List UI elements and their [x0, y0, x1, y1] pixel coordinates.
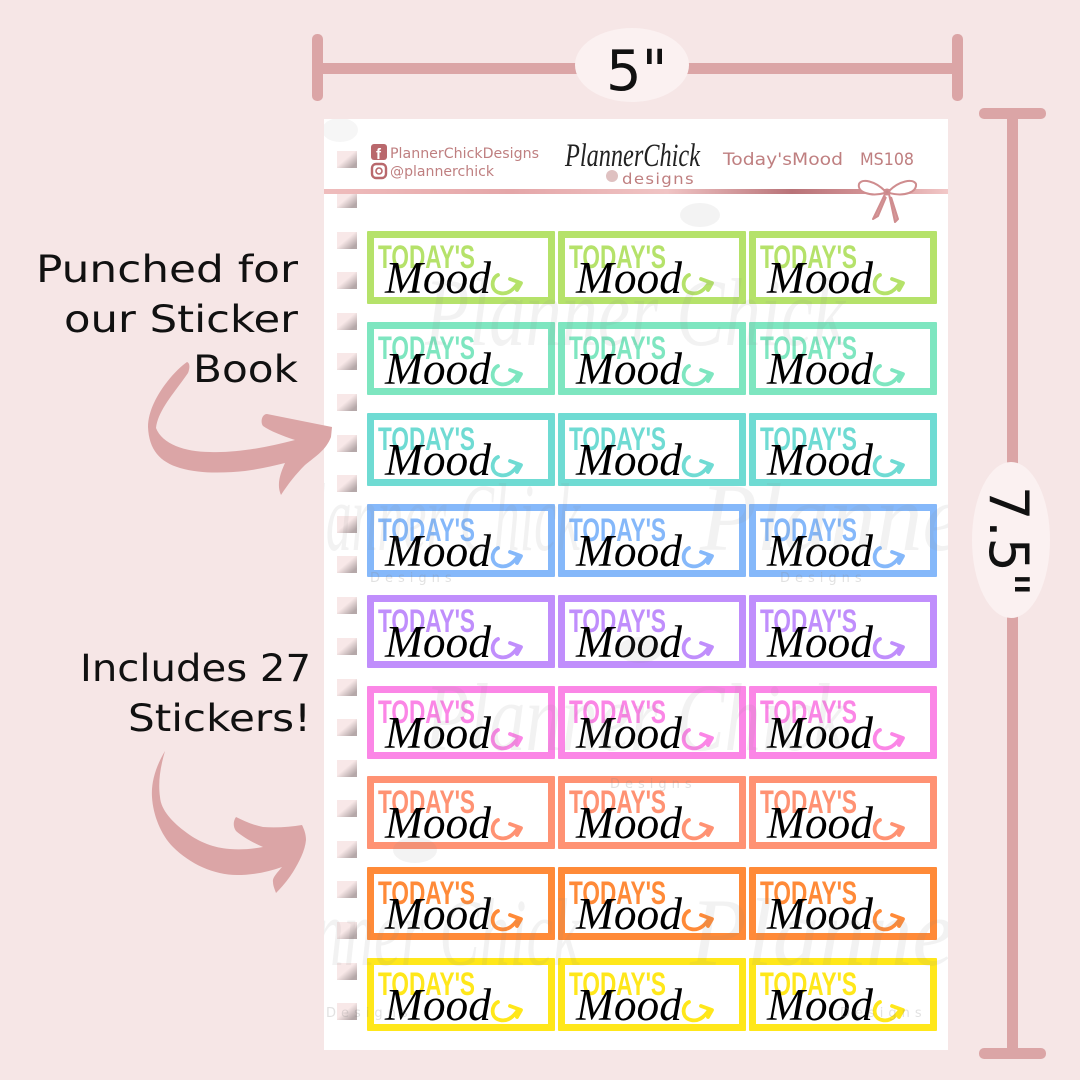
sticker: [367, 504, 555, 577]
sticker: [367, 776, 555, 849]
sticker: Mood: [766, 708, 873, 758]
sticker: [367, 958, 555, 1031]
sticker: [749, 231, 937, 304]
sticker: Mood: [575, 798, 682, 848]
sticker: Mood: [384, 435, 491, 485]
sticker: [558, 776, 746, 849]
watermarks: Planner: [689, 879, 991, 986]
callout text: punched for our sticker book: Book: [193, 348, 299, 391]
sticker: TODAY'S: [378, 603, 475, 639]
sticker: Mood: [384, 798, 491, 848]
sticker: TODAY'S: [378, 966, 475, 1002]
sticker: TODAY'S: [378, 512, 475, 548]
sticker: [558, 958, 746, 1031]
sticker: Mood: [575, 526, 682, 576]
sticker: [749, 686, 937, 759]
callout text: includes 27 stickers: Stickers!: [128, 697, 311, 740]
watermarks: Planner Chick: [424, 664, 847, 771]
sticker sheet background: [324, 119, 948, 1050]
sticker: TODAY'S: [760, 966, 857, 1002]
sticker: TODAY'S: [378, 875, 475, 911]
sticker: Mood: [575, 435, 682, 485]
sticker row 7: coral: [367, 776, 937, 849]
sticker: Mood: [575, 344, 682, 394]
sticker: TODAY'S: [760, 875, 857, 911]
watermarks: Designs: [370, 571, 457, 586]
header: sheet title and code: MS108: [860, 150, 914, 169]
sticker: [367, 413, 555, 486]
sticker: [558, 686, 746, 759]
sticker row 1: green: [367, 231, 937, 304]
sticker: [749, 595, 937, 668]
sticker: [367, 867, 555, 940]
callout text: punched for our sticker book: our Sticker: [64, 298, 299, 341]
sticker: TODAY'S: [760, 694, 857, 730]
sticker: [749, 504, 937, 577]
sticker: TODAY'S: [760, 330, 857, 366]
sticker: TODAY'S: [760, 512, 857, 548]
watermarks: Planner: [699, 464, 1001, 571]
sticker: [749, 867, 937, 940]
watermarks: Designs: [610, 777, 697, 792]
callout text: punched for our sticker book: [36, 248, 299, 391]
sticker: Mood: [384, 980, 491, 1030]
watermarks: Planner Chick: [229, 879, 582, 986]
sticker: [749, 413, 937, 486]
sticker: Mood: [384, 617, 491, 667]
sticker: [558, 413, 746, 486]
arrow: to punch holes: [148, 362, 332, 495]
sticker: [367, 322, 555, 395]
sticker: [749, 776, 937, 849]
sticker: TODAY'S: [378, 694, 475, 730]
sticker: Mood: [384, 889, 491, 939]
sticker: TODAY'S: [378, 784, 475, 820]
sticker row 8: orange: [367, 867, 937, 940]
watermarks: [229, 118, 1001, 1021]
sticker: TODAY'S: [569, 239, 666, 275]
sticker: TODAY'S: [760, 421, 857, 457]
height dimension bar: 7.5 inches: [972, 108, 1050, 1059]
header: social handles: PlannerChickDesigns: [390, 146, 539, 162]
sticker: Mood: [384, 708, 491, 758]
sticker row 6: pink: [367, 686, 937, 759]
icon: rose gold bow: [859, 181, 916, 222]
watermarks: Planner Chick: [424, 259, 847, 366]
sticker: Mood: [384, 253, 491, 303]
sticker: [558, 322, 746, 395]
header: sheet title and code: [722, 150, 914, 169]
header: social handles: f: [376, 146, 382, 163]
sticker: Mood: [766, 798, 873, 848]
sticker: [749, 958, 937, 1031]
sticker: TODAY'S: [569, 875, 666, 911]
sticker: Mood: [575, 708, 682, 758]
sticker: Mood: [766, 253, 873, 303]
sticker: TODAY'S: [760, 239, 857, 275]
header: social handles: @plannerchick: [390, 164, 495, 180]
height dimension bar: 7.5 inches: 7.5": [977, 486, 1040, 597]
sticker: TODAY'S: [760, 603, 857, 639]
sticker: [367, 686, 555, 759]
sticker: TODAY'S: [569, 966, 666, 1002]
sticker: TODAY'S: [760, 784, 857, 820]
sticker row 5: purple: [367, 595, 937, 668]
arrow: to stickers: [152, 751, 306, 893]
watermarks: Designs: [326, 1006, 413, 1021]
sticker: TODAY'S: [569, 421, 666, 457]
watermarks: Designs: [780, 571, 867, 586]
sticker: TODAY'S: [378, 239, 475, 275]
sticker: TODAY'S: [569, 512, 666, 548]
watermarks: Planner Chick: [279, 464, 581, 571]
header: sheet title and code: Today'sMood: [722, 150, 843, 169]
sticker: [367, 595, 555, 668]
sticker: [367, 231, 555, 304]
sticker: [558, 504, 746, 577]
header: Planner Chick logo: [564, 138, 701, 188]
header: social handles: [371, 144, 539, 180]
sticker: TODAY'S: [569, 694, 666, 730]
sticker row 3: teal: [367, 413, 937, 486]
sticker: Mood: [766, 889, 873, 939]
width dimension bar: 5 inches: [312, 28, 963, 104]
callout text: includes 27 stickers: Includes 27: [80, 647, 311, 690]
callout text: includes 27 stickers: [80, 647, 311, 740]
sticker: [558, 867, 746, 940]
sticker: [749, 322, 937, 395]
sticker: Mood: [766, 344, 873, 394]
sticker: TODAY'S: [569, 603, 666, 639]
sticker: Mood: [766, 526, 873, 576]
sticker: Mood: [575, 889, 682, 939]
sticker: TODAY'S: [569, 330, 666, 366]
sticker row 9: yellow: [367, 958, 937, 1031]
sticker: TODAY'S: [569, 784, 666, 820]
watermarks: Designs: [840, 1006, 927, 1021]
sticker: [558, 595, 746, 668]
sticker: [558, 231, 746, 304]
width dimension bar: 5 inches: 5": [606, 39, 667, 104]
header: Planner Chick logo: PlannerChick: [564, 138, 701, 174]
sticker: TODAY'S: [378, 330, 475, 366]
header foil rule: [324, 189, 948, 194]
sticker: Mood: [766, 980, 873, 1030]
callout text: punched for our sticker book: Punched for: [36, 248, 299, 291]
sticker: Mood: [384, 526, 491, 576]
sticker: Mood: [575, 980, 682, 1030]
sticker: TODAY'S: [378, 421, 475, 457]
punch holes: [337, 151, 357, 1020]
sticker: Mood: [384, 344, 491, 394]
sticker row 4: blue: [367, 504, 937, 577]
header: Planner Chick logo: designs: [622, 170, 695, 188]
sticker: Mood: [575, 617, 682, 667]
sticker: Mood: [766, 617, 873, 667]
sticker: Mood: [766, 435, 873, 485]
sticker row 2: mint: [367, 322, 937, 395]
sticker: Mood: [575, 253, 682, 303]
